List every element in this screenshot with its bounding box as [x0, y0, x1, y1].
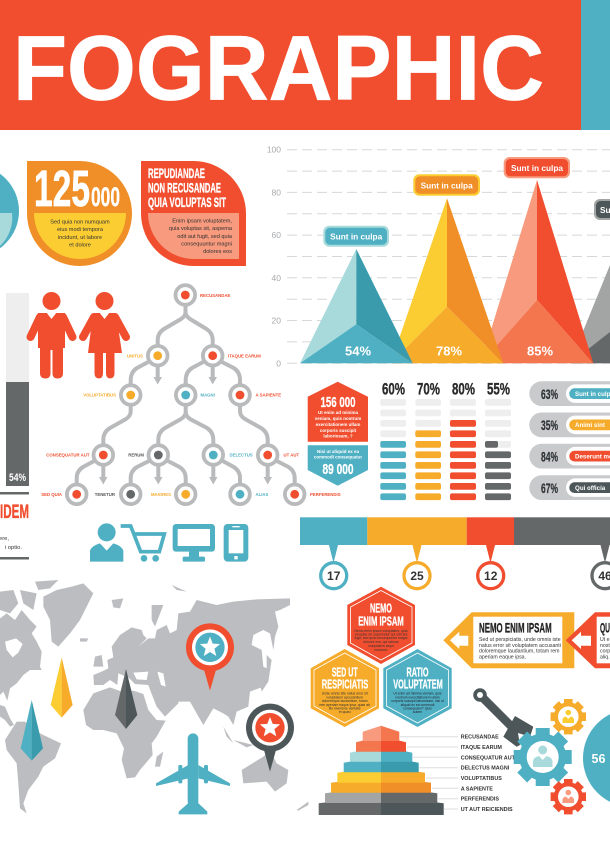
panel: teal hexagon: aliquid ex ea commodi [401, 703, 435, 707]
panel: 125 000 badge [27, 160, 132, 266]
panel: 156 000 and 89 000 [308, 382, 368, 486]
panel: percentage pills: 67% [541, 481, 558, 496]
teal triangle [300, 249, 413, 363]
chart: triangle percentages: 40 [272, 273, 281, 283]
panel: orange hexagon: voluptatem accusantium [326, 695, 363, 699]
pin: dark star marker [246, 704, 294, 772]
pyramid chart: UT AUT REICIENDIS [461, 807, 513, 813]
panel: 125 000 badge: 000 [91, 182, 120, 212]
gray triangle [570, 265, 610, 363]
header banner [0, 0, 610, 130]
callout: orange arrow box [443, 612, 574, 668]
callout: orange arrow box: NEMO ENIM IPSAM [479, 620, 552, 636]
flow tree diagram: ALIAS [256, 492, 269, 497]
pyramid chart: A SAPIENTE [461, 786, 493, 792]
segmented strip with markers: 17 [327, 569, 341, 583]
panel: 156 000 and 89 000: commodi consequatur [314, 454, 362, 460]
callout: orange arrow box: Sed ut perspiciatis, unde omnis iste [479, 637, 561, 643]
big teal circle 56: 56 [592, 752, 605, 766]
panel: percentage pills [529, 381, 610, 500]
panel: 156 000 and 89 000: 156 000 [320, 395, 356, 411]
panel: repudiandae leaf: Enim ipsam voluptatem, [172, 218, 232, 224]
flow tree diagram: MAGNI [200, 392, 215, 398]
flow tree diagram: UT AUT [284, 452, 299, 458]
flow tree diagram: DELECTUS [230, 452, 253, 458]
panel: teal hexagon: nostrum exercitationem ullam [395, 695, 440, 699]
world map [0, 580, 308, 814]
panel: 125 000 badge: et dolore [69, 242, 91, 248]
panel: percentage pills: 84% [541, 450, 558, 464]
chart: triangle percentages: 0 [276, 358, 281, 368]
pin: yellow [51, 657, 73, 718]
panel: orange hexagon: illo inventore veritatis [329, 706, 361, 710]
panel: repudiandae leaf [141, 161, 246, 266]
icon: man and woman [30, 292, 126, 378]
panel: 156 000 and 89 000: veniam, quis nostrum [315, 416, 361, 421]
chart: stacked bar columns [380, 379, 511, 500]
callout: red arrow box: aliq. [600, 655, 610, 661]
teal circle partial [0, 165, 19, 257]
panel: 125 000 badge: incidunt, ut labore [58, 235, 102, 241]
panel: repudiandae leaf: odit aut fugit, sed quia [177, 234, 233, 240]
panel: repudiandae leaf: consequuntur magni [181, 242, 232, 248]
chart: stacked bar columns: 55% [487, 379, 510, 398]
flow tree diagram: PERFERENDIS [310, 492, 341, 497]
callout: red arrow box: Ut e [600, 637, 610, 643]
panel: left 54% bar: 54% [9, 472, 26, 484]
panel: red hexagon [347, 587, 415, 664]
panel: teal hexagon: Ut enim ad minima veniam, quis [393, 692, 442, 696]
segmented strip with markers: 12 [484, 569, 498, 583]
panel: red hexagon: voluptatem sequi [368, 644, 394, 648]
chart: stacked bar columns: 70% [417, 379, 440, 398]
title: FOGRAPHIC [13, 18, 544, 120]
panel: repudiandae leaf: REPUDIANDAE [148, 165, 205, 181]
panel: red hexagon: fugit, sed quia consequuntur magni [355, 636, 408, 640]
icon: yellow gear [551, 699, 586, 734]
pin: teal [21, 700, 43, 761]
panel: repudiandae leaf: quia voluptas sit, aspema [169, 226, 233, 232]
tag: red: Sunt in culpa [511, 163, 563, 173]
tag: red [504, 157, 570, 178]
icon: airplane [156, 733, 230, 814]
panel: orange hexagon [311, 649, 379, 727]
panel: red hexagon: dolores eos, qui ratione [363, 640, 399, 644]
flow tree diagram: ITAQUE EARUM [228, 354, 261, 358]
flow tree diagram: CONSEQUATUR AUT [46, 452, 90, 458]
icon: wrench [473, 688, 533, 747]
panel: 156 000 and 89 000: 89 000 [322, 462, 354, 478]
panel: 156 000 and 89 000: Ut enim ad minima [318, 410, 358, 415]
panel: orange hexagon: Unde omnis iste natus error sit [322, 692, 368, 696]
icon row: user cart monitor phone [90, 523, 248, 562]
panel: teal hexagon: consequatur? Quis [403, 706, 432, 710]
panel: left 54% bar [6, 293, 29, 486]
panel: 156 000 and 89 000: laboriosam, ? [323, 434, 353, 438]
text block: idem: IDEM [0, 502, 29, 523]
tag: teal: Sunt in culpa [330, 232, 383, 242]
callout: orange arrow box: aperiam eaque ipsa. [479, 655, 526, 661]
panel: orange hexagon: doloremque laudantium, totam [322, 699, 368, 703]
panel: repudiandae leaf: NON RECUSANDAE [148, 180, 221, 196]
panel: repudiandae leaf: QUIA VOLUPTAS SIT [148, 194, 226, 210]
chart: triangle percentages: 78% [436, 344, 462, 358]
tag: dark [594, 199, 610, 220]
chart: triangle percentages [267, 145, 610, 368]
flow tree diagram: RERUM [128, 452, 144, 458]
text block: idem: i optio. [5, 545, 22, 551]
flow tree diagram: MAIORES [151, 492, 171, 497]
panel: orange hexagon: et quasi [339, 710, 351, 714]
pyramid chart [319, 726, 516, 815]
panel: 156 000 and 89 000: corporis suscipit [320, 428, 357, 433]
callout: orange arrow box: natus error sit voluptatem accusanti [479, 643, 561, 649]
panel: red hexagon: nesciunt. [374, 648, 388, 652]
panel: orange hexagon: SED UT [332, 665, 358, 680]
chart: triangle percentages: 60 [272, 230, 281, 240]
red triangle [481, 180, 593, 363]
tag: orange: Sunt in culpa [421, 180, 473, 190]
flow tree diagram [41, 285, 341, 504]
panel: 125 000 badge: 125 [34, 160, 90, 217]
chart: stacked bar columns: 60% [382, 379, 405, 398]
orange triangle [391, 198, 503, 363]
icon: red gear [551, 779, 586, 814]
pyramid chart: CONSEQUATUR AUT [461, 755, 516, 761]
pyramid chart: RECUSANDAE [461, 735, 499, 741]
panel: percentage pills: Animi sint [575, 422, 605, 429]
panel: percentage pills: 35% [541, 418, 558, 433]
flow tree diagram: UNITUS [127, 354, 143, 358]
chart: triangle percentages: 85% [527, 344, 553, 358]
icon: teal gear [514, 728, 572, 786]
panel: teal hexagon: corporis suscipit laboriosam, nisi ut [391, 699, 444, 703]
callout: red arrow box: nost [600, 643, 610, 649]
chart: triangle percentages: 80 [272, 187, 281, 197]
panel: teal hexagon [383, 649, 452, 727]
pyramid chart: PERFERENDIS [461, 797, 499, 803]
tag: orange [413, 174, 480, 196]
chart: triangle percentages: 54% [345, 344, 371, 358]
callout: red arrow box: corp [600, 649, 610, 655]
panel: orange hexagon: rem aperiam eaque ipsa, quae ab [319, 703, 370, 707]
panel: 156 000 and 89 000: exercitationem ullam [316, 422, 360, 427]
segmented strip with markers [300, 517, 610, 589]
panel: 156 000 and 89 000: Nisi ut aliquid ex ea [317, 449, 360, 454]
flow tree diagram: RECUSANDAE [200, 293, 230, 298]
chart: stacked bar columns: 80% [452, 379, 475, 398]
panel: red hexagon: NEMO [370, 601, 392, 615]
panel: red hexagon: Nemo enim ipsam voluptatem, quia [354, 629, 408, 633]
chart: triangle percentages: 20 [272, 316, 281, 326]
panel: percentage pills: 63% [541, 387, 558, 402]
pyramid chart: VOLUPTATIBUS [461, 776, 502, 782]
panel: percentage pills: Qui officia [575, 485, 606, 492]
chart: triangle percentages: 100 [267, 145, 281, 155]
panel: teal hexagon: autem [413, 710, 422, 714]
pyramid chart: DELECTUS MAGNI [461, 766, 510, 772]
panel: orange hexagon: RESPICIATIS [322, 676, 368, 692]
flow tree diagram: TENETUR [95, 492, 116, 497]
pin: dark [115, 669, 137, 729]
pyramid chart: ITAQUE EARUM [461, 745, 502, 751]
panel: teal hexagon: RATIO [406, 665, 428, 680]
flow tree diagram: SED QUIA [41, 492, 62, 497]
flow tree diagram: A SAPIENTE [256, 392, 281, 398]
panel: teal hexagon: VOLUPTATEM [393, 676, 443, 692]
panel: red hexagon: voluptas sit, aspernatur aut odit aut [355, 632, 407, 636]
panel: 125 000 badge: Sed quia non numquam [50, 220, 110, 226]
callout: red arrow box [566, 612, 610, 668]
segmented strip with markers: 25 [410, 569, 424, 583]
tag: teal [323, 226, 389, 247]
panel: red hexagon: ENIM IPSAM [358, 614, 404, 629]
big teal circle 56 [583, 709, 610, 807]
panel: repudiandae leaf: dolores eos [203, 249, 232, 255]
text block: idem [0, 492, 29, 560]
pin: red star marker [186, 623, 234, 691]
callout: orange arrow box: doloremque laudantium, totam rem [479, 649, 559, 655]
panel: 125 000 badge: eius modi tempora [57, 227, 104, 233]
flow tree diagram: VOLUPTATIBUS [83, 392, 116, 398]
